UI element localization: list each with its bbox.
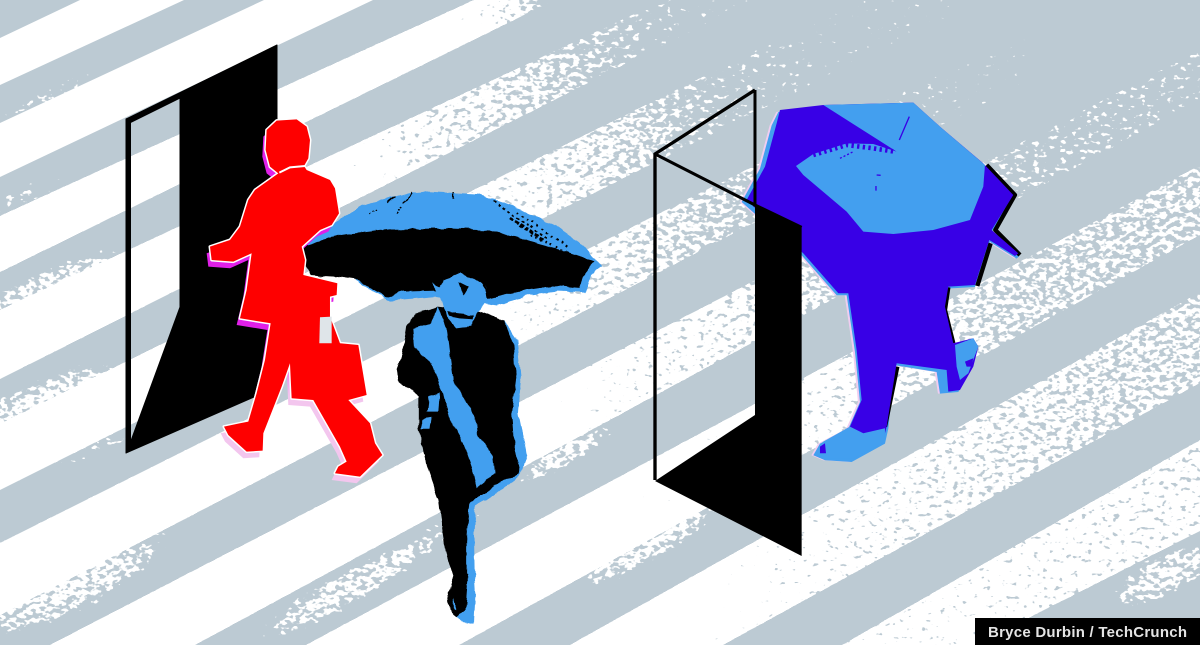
- magenta and pink offset shadow: [207, 126, 379, 483]
- figure coat and legs, black: [397, 307, 520, 617]
- white keyline and red silhouette: [210, 119, 382, 477]
- umbrella underside, black: [302, 228, 595, 299]
- person: man in red suit with bag, walking into door: [207, 119, 382, 483]
- door: right, black floor shadow panel with thin frame: [655, 90, 802, 556]
- umbrella canopy, blue top: [302, 192, 602, 306]
- blue offset shadow: [742, 105, 1020, 462]
- person: figure under umbrella, seen from above: [302, 192, 602, 623]
- umbrella fine marks: [813, 117, 909, 191]
- umbrella light blue panel: [796, 103, 985, 234]
- scarf, blue: [413, 307, 495, 488]
- person: walking figure under a blue-and-indigo umbrella, seen from above: [740, 103, 1020, 462]
- shoe details: [820, 358, 973, 453]
- figure blue offset shadow: [457, 320, 527, 623]
- umbrella scuff marks: [369, 192, 570, 252]
- credit box: [975, 618, 1200, 645]
- collar keyline: [279, 166, 305, 173]
- head, blue with dark hair and glasses: [432, 267, 487, 328]
- black shadow strokes, right side: [885, 165, 1020, 427]
- coat fold highlights: [422, 393, 457, 610]
- body, indigo: [747, 103, 1018, 457]
- shoes, blue: [817, 338, 978, 458]
- door: left, black open door with thin frame: [126, 45, 277, 453]
- crosswalk: solid white stripes, upper left: [0, 0, 373, 177]
- credit box: Bryce Durbin / TechCrunch: [988, 624, 1187, 641]
- bag handle gap: [319, 317, 332, 343]
- pale pink offset shadow: [740, 105, 1018, 462]
